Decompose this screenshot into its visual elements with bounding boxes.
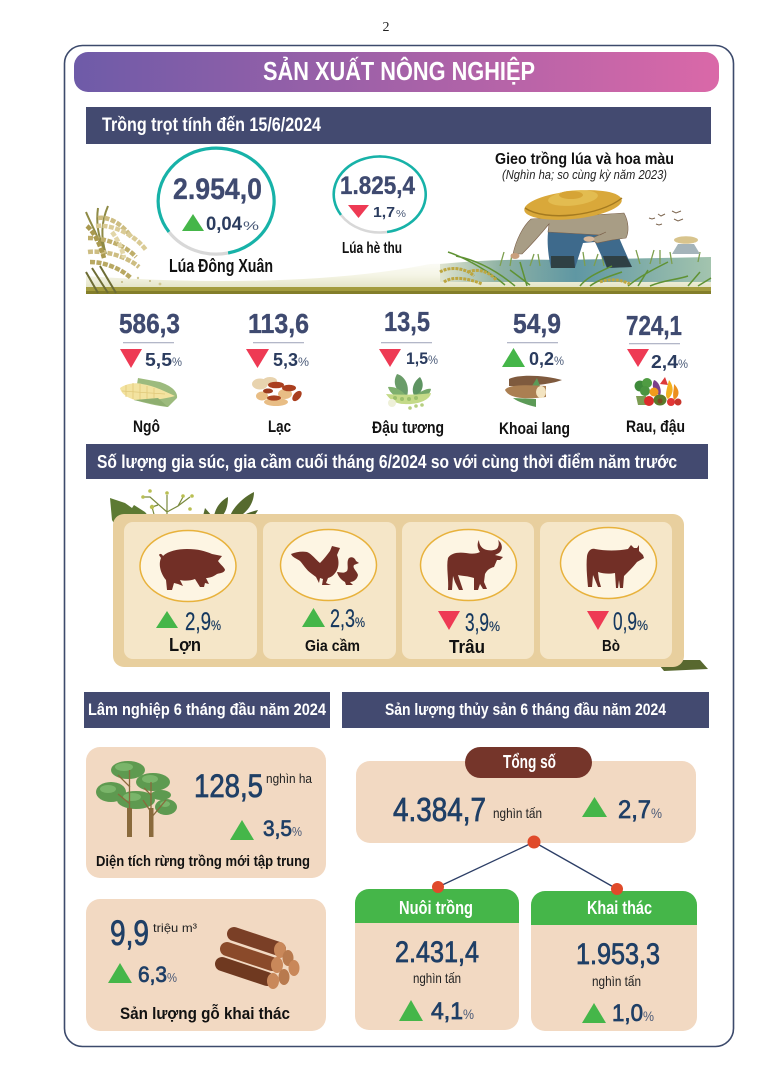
panel: total fisheries: 2,7 [618, 796, 651, 824]
crop: sweet potato: 0,2 [529, 349, 554, 369]
label: Diện tích rừng trồng mới tập trung [96, 853, 310, 870]
icon: corn [120, 378, 177, 407]
card: cattle [540, 522, 672, 659]
panel: total fisheries [356, 747, 696, 843]
label: Lạc [268, 417, 291, 436]
card: pig: % [211, 617, 221, 633]
crop: sweet potato: 54,9 [513, 308, 561, 339]
crop: peanut: 5,3 [273, 350, 298, 370]
icon: chicken and duck [291, 546, 359, 585]
crop: soybean: 1,5 [406, 349, 428, 368]
icon: pig [159, 549, 225, 590]
card: poultry: % [355, 614, 365, 630]
panel: aquaculture: Nuôi trồng [399, 898, 473, 918]
crop: vegetables: 2,4 [651, 352, 678, 372]
label: Khoai lang [499, 419, 570, 438]
panel: aquaculture [355, 889, 519, 1030]
card: buffalo: % [489, 618, 500, 634]
crop: peanut [246, 308, 309, 436]
panel: capture fisheries [531, 891, 697, 1031]
icon: logs [222, 934, 300, 989]
crop: corn: 586,3 [119, 308, 180, 339]
panel: timber output: triệu m³ [153, 921, 197, 935]
icon: rice plants in water [448, 252, 711, 286]
panel: new forest area [86, 747, 326, 878]
card: cattle: % [637, 617, 648, 633]
panel: aquaculture: nghìn tấn [413, 970, 461, 986]
heading: forestry: Lâm nghiệp 6 tháng đầu năm 2024 [88, 700, 326, 719]
panel: aquaculture: % [463, 1006, 474, 1022]
stat circle: summer-autumn rice: % [396, 209, 406, 220]
panel: capture fisheries: % [643, 1008, 654, 1024]
panel: timber output [86, 899, 326, 1031]
icon: sweet potato [505, 376, 562, 407]
card: buffalo: Trâu [449, 637, 485, 657]
panel: capture fisheries: Khai thác [587, 898, 652, 918]
icon: grass behind farmer [500, 250, 700, 266]
panel: total fisheries: Tổng số [503, 752, 556, 772]
crop: sweet potato [499, 308, 570, 438]
panel: livestock [113, 514, 684, 667]
icon: farmer [510, 186, 700, 268]
crop: soybean [372, 306, 444, 437]
crop: vegetables [626, 310, 688, 436]
crop: vegetables: 724,1 [626, 310, 682, 341]
icon: trees [96, 761, 177, 837]
crop: corn: % [172, 355, 182, 369]
card: buffalo [402, 522, 534, 659]
panel: new forest area: 3,5 [263, 816, 292, 841]
icon: birds [649, 211, 683, 225]
heading: crops: Trồng trọt tính đến 15/6/2024 [102, 115, 321, 136]
panel: new forest area: % [292, 824, 302, 839]
label: Lúa Đông Xuân [169, 256, 273, 276]
heading: livestock: Số lượng gia súc, gia cầm cuối tháng 6/2024 so với cùng thời điểm năm trước [97, 452, 677, 472]
label: Rau, đậu [626, 417, 685, 436]
panel: timber output: % [167, 970, 177, 985]
stat circle: summer-autumn rice [334, 156, 426, 257]
panel: total fisheries: 4.384,7 [393, 791, 486, 828]
connector lines [438, 842, 617, 889]
stat circle: summer-autumn rice: 1,7 [373, 204, 395, 221]
stat circle: winter-spring rice [158, 148, 274, 276]
crop: sweet potato: % [554, 354, 564, 368]
title banner [74, 52, 719, 92]
label: Ngô [133, 417, 160, 436]
heading: livestock [86, 444, 708, 479]
label: Đậu tương [372, 418, 444, 437]
panel: total fisheries: nghìn tấn [493, 805, 542, 821]
crop: peanut: % [298, 355, 309, 369]
card: buffalo: 3,9 [465, 609, 489, 637]
crop: vegetables: % [678, 357, 688, 371]
decoration: leaves [110, 489, 708, 671]
panel: new forest area: 128,5 [194, 768, 263, 804]
panel: capture fisheries: 1.953,3 [576, 938, 660, 971]
stat circle: summer-autumn rice: 1.825,4 [340, 172, 415, 200]
title: SẢN XUẤT NÔNG NGHIỆP [263, 56, 535, 86]
illustration: rice field with farmer [86, 186, 711, 294]
card: poultry: Gia cầm [305, 638, 360, 655]
icon: vegetables [634, 377, 682, 406]
panel: aquaculture: 2.431,4 [395, 936, 479, 969]
icon: buffalo [447, 540, 503, 590]
icon: rice stalks left [86, 206, 161, 293]
card: pig [124, 522, 257, 659]
panel: aquaculture: 4,1 [431, 998, 463, 1025]
card: pig: 2,9 [185, 608, 211, 636]
panel: total fisheries: % [651, 805, 662, 821]
connector dots [432, 836, 623, 895]
crop: peanut: 113,6 [248, 308, 309, 339]
heading: crops [86, 107, 711, 144]
crop: corn [119, 308, 182, 436]
icon: cow [587, 545, 644, 588]
crop: soybean: % [428, 353, 438, 367]
card: poultry: 2,3 [330, 605, 355, 633]
label: Lúa hè thu [342, 240, 402, 257]
card: cattle: 0,9 [613, 608, 637, 636]
crop: corn: 5,5 [145, 350, 172, 370]
icon: soybeans [386, 374, 431, 410]
panel: capture fisheries: nghìn tấn [592, 973, 641, 989]
caption: sowing: (Nghìn ha; so cùng kỳ năm 2023) [502, 167, 667, 182]
panel: timber output: 6,3 [138, 962, 167, 987]
card: poultry [263, 522, 396, 659]
stat circle: winter-spring rice: % [243, 219, 259, 233]
stat circle: winter-spring rice: 2.954,0 [173, 173, 262, 206]
heading: forestry [84, 692, 330, 728]
page number: 2 [382, 20, 390, 35]
panel: capture fisheries: 1,0 [612, 1000, 643, 1027]
card: pig: Lợn [169, 635, 201, 655]
stat circle: winter-spring rice: 0,04 [206, 214, 242, 235]
caption: sowing [495, 151, 674, 182]
caption: sowing: Gieo trồng lúa và hoa màu [495, 151, 674, 168]
crop: soybean: 13,5 [384, 306, 430, 337]
label: Sản lượng gỗ khai thác [120, 1004, 290, 1023]
panel: timber output: 9,9 [110, 914, 149, 953]
icon: peanuts [252, 377, 304, 406]
card: cattle: Bò [602, 638, 620, 655]
heading: fisheries: Sản lượng thủy sản 6 tháng đầu năm 2024 [385, 700, 666, 719]
panel: new forest area: nghìn ha [266, 771, 313, 786]
heading: fisheries [342, 692, 709, 728]
